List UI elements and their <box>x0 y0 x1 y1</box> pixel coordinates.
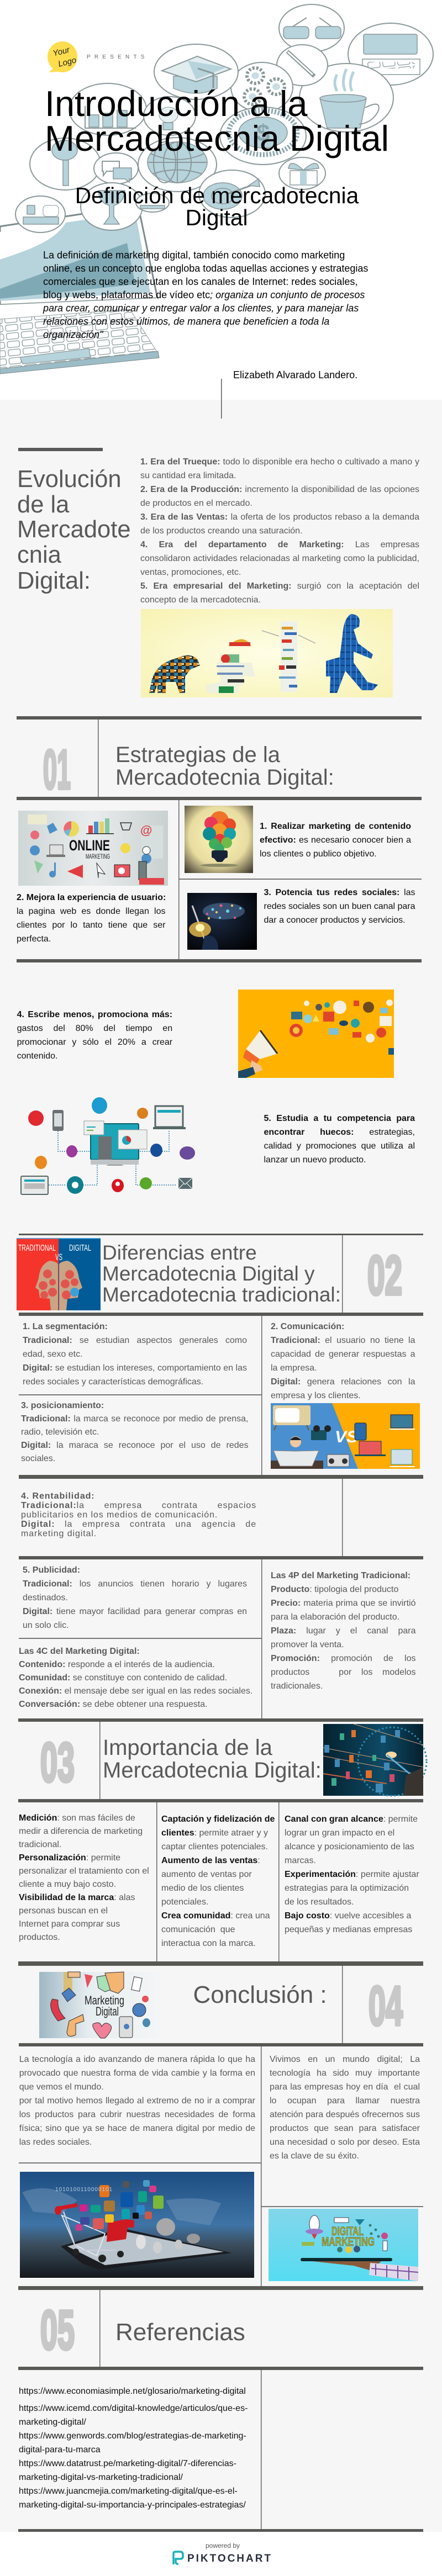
image: online marketing <box>18 811 168 886</box>
illustration: marketing icons in circles with laptop: $ <box>256 120 270 147</box>
text: comunicación: 2. Comunicación: <box>271 1322 344 1331</box>
text: publicidad: 5. Publicidad: <box>23 1565 80 1575</box>
image: digital marketing on tablet: MARKETING <box>322 2235 375 2249</box>
definition paragraph: comerciales que se ejecutan en los canales de Internet: redes sociales, <box>43 276 357 287</box>
text: references list: https://www.juancmejia.com/marketing-digital/que-es-el- <box>19 2487 238 2496</box>
icon: piktochart logo <box>173 2552 183 2564</box>
text column: captación: Aumento de las ventas: <box>161 1856 260 1865</box>
author: Elizabeth Alvarado Landero. <box>233 369 357 380</box>
text: rentabilidad: Tradicional:la empresa contrata espacios <box>21 1501 256 1510</box>
text: escribe menos: contenido. <box>17 1051 57 1061</box>
heading: Mercadote <box>17 516 131 543</box>
heading: Mercadotecnia tradicional: <box>102 1283 341 1306</box>
text: escribe menos: promocionar y sólo el 20% a crear <box>17 1038 172 1047</box>
text: estudia a tu competencia: calidad y promociones que utiliza al <box>264 1141 415 1151</box>
text: experiencia de usuario: 2. Mejora la experiencia de usuario: <box>17 893 166 902</box>
text: comunicación: capacidad de generar respuestas a <box>271 1350 415 1359</box>
text: experiencia de usuario: clientes por lo tanto tiene que ser <box>17 921 166 930</box>
text: estudia a tu competencia: lanzar un nuevo producto. <box>264 1155 366 1165</box>
image: online marketing: MARKETING <box>86 853 110 860</box>
text column: medición: Visibilidad de la marca: alas <box>19 1893 135 1902</box>
text: conclusión derecha: lo ocupan para llamar nuestra <box>270 2096 420 2106</box>
text: rentabilidad: Digital: la empresa contrata una agencia de <box>21 1520 256 1529</box>
text: conclusión izquierda: La tecnología a ido avanzando de manera rápida lo que ha <box>19 2055 255 2064</box>
presents label: PRESENTS <box>87 54 149 60</box>
text: conclusión derecha: productos que sean para satisfacer <box>270 2124 420 2133</box>
icon: yellow logo bubble: Logo <box>57 55 77 69</box>
text: las 4P: Precio: materia prima que se invirtió <box>271 1599 415 1608</box>
text column: canal: estrategias para la optimización <box>285 1884 409 1893</box>
definition paragraph: online, es un concepto que engloba todas aquellas acciones y estrategias <box>43 263 368 274</box>
text: rentabilidad: 4. Rentabilidad: <box>21 1491 95 1501</box>
eras list <box>140 455 419 607</box>
text column: captación: captar clientes potenciales. <box>161 1842 268 1852</box>
text column: canal: Canal con gran alcance: permite <box>285 1815 418 1824</box>
eras list: 3. Era de las Ventas: la oferta de los productos rebaso a la demanda <box>140 512 419 522</box>
text column: medición: personalizar el tratamiento con el <box>19 1866 149 1875</box>
text column: canal: lograr un gran impacto en el <box>285 1828 394 1838</box>
text: posicionamiento: Tradicional: la marca se reconoce por medio de prensa, <box>21 1414 249 1424</box>
text column: canal: Experimentación: permite ajustar <box>285 1870 419 1879</box>
text: estudia a tu competencia: 5. Estudia a tu competencia para <box>264 1114 415 1123</box>
text column: captación: medio de los clientes <box>161 1884 244 1893</box>
text: conclusión derecha: una necesidad o solo por deseo. Esta <box>270 2138 420 2147</box>
text: posicionamiento <box>21 1399 249 1466</box>
heading: Importancia de la <box>103 1736 273 1760</box>
text: redes sociales: redes sociales son un buen canal para <box>264 902 415 911</box>
text: references list: marketing-digital-su-importancia-y-principales-estrategias/ <box>19 2500 246 2510</box>
text: rentabilidad: publicitarios en los medios de comunicación. <box>21 1510 218 1520</box>
text column: medición: Personalización: permite <box>19 1853 120 1862</box>
text: publicidad <box>23 1563 247 1632</box>
text: redes sociales <box>264 886 415 927</box>
text column: medición: Medición: son mas fáciles de <box>19 1813 135 1822</box>
text column: captación <box>161 1812 277 1950</box>
text: las 4P: para la elaboración del producto. <box>271 1612 399 1622</box>
text column: medición: cliente a muy bajo costo. <box>19 1880 116 1889</box>
eras list: 2. Era de la Producción: incremento la disponibilidad de las opciones <box>140 485 419 494</box>
text: las 4C: Contenido: responde a el interés de la audiencia. <box>19 1660 215 1669</box>
text column: captación: potenciales. <box>161 1897 208 1907</box>
image: colourful light bulb <box>185 806 253 873</box>
eras list: su cantidad era limitada. <box>140 471 236 480</box>
text column: canal: pequeñas y medianas empresas <box>285 1925 412 1934</box>
text: comunicación: Tradicional: el usuario no tiene la <box>271 1336 415 1345</box>
text: las 4P: Las 4P del Marketing Tradicional: <box>271 1571 411 1580</box>
text: conclusión izquierda: provocado que nuestra forma de vida cambie y la forma en <box>19 2069 255 2078</box>
definition paragraph: La definición de marketing digital, también conocido como marketing <box>43 250 345 261</box>
eras list: consolidaron actividades relacionadas al marketing como la publicidad, <box>140 554 419 563</box>
text: publicidad: un solo clic. <box>23 1621 69 1630</box>
image: marketing digital doodles <box>39 1972 161 2038</box>
text: posicionamiento: Digital: la maraca se reconoce por el uso de redes <box>21 1440 249 1450</box>
footer: powered by piktochart <box>0 2532 442 2576</box>
text: references list: https://www.icemd.com/digital-knowledge/articulos/que-es- <box>19 2404 248 2413</box>
text: conclusión derecha: para las empresas hoy en día el cual <box>270 2082 420 2092</box>
eras list: ventas, promociones, etc. <box>140 568 241 577</box>
text: conclusión izquierda: por tal motivo hemos llegado al extremo de no ir a comprar <box>19 2096 255 2106</box>
image: online marketing: @ <box>140 823 152 837</box>
text: marketing de contenido: 1. Realizar marketing de contenido <box>260 822 411 831</box>
text: escribe menos: gastos del 80% del tiempo en <box>17 1024 172 1033</box>
text: publicidad: Digital: tiene mayor facilidad para generar compras en <box>23 1607 247 1616</box>
image: digital network tech <box>323 1724 427 1796</box>
number 04: 04 <box>369 1975 403 2037</box>
text: escribe menos: 4. Escribe menos, promociona más: <box>17 1010 172 1019</box>
text column: captación: interactua con la marca. <box>161 1939 256 1948</box>
text: las 4P: tradicionales. <box>271 1681 323 1691</box>
text: references list: marketing-digital/ <box>19 2418 86 2427</box>
heading: Diferencias entre <box>102 1241 257 1264</box>
number 03: 03 <box>40 1732 75 1794</box>
text column: medición: productos. <box>19 1933 60 1942</box>
title: Mercadotecnia Digital <box>45 118 389 158</box>
text column: captación: comunicación que <box>161 1925 235 1934</box>
text column: captación: aumento de ventas por <box>161 1870 252 1879</box>
text column: captación: Crea comunidad: crea una <box>161 1911 270 1921</box>
image: shopping cart on tablet <box>20 2172 254 2278</box>
definition paragraph: relaciones con estos últimos, de manera que beneficien a toda la <box>43 316 329 327</box>
text: experiencia de usuario: la pagina web es donde llegan los <box>17 907 166 916</box>
text column: canal: alcance y posicionamiento de las <box>285 1842 414 1852</box>
heading: Conclusión : <box>193 1981 327 2008</box>
eras list: concepto de la mercadotecnia. <box>140 595 261 605</box>
title: Introducción a la <box>45 83 308 124</box>
text: publicidad: Tradicional: los anuncios tienen horario y lugares <box>23 1579 247 1589</box>
illustration: marketing icons in circles with laptop <box>0 4 433 374</box>
number 05: 05 <box>40 2299 75 2361</box>
text: conclusión izquierda: física; sino que ya se hace de manera digital por medio de <box>19 2124 255 2133</box>
text: las 4P: Producto: tipologia del producto <box>271 1585 398 1594</box>
panel: hero header <box>0 0 442 400</box>
text: references list: marketing-digital-vs-marketing-tradicional/ <box>19 2473 183 2482</box>
text: experiencia de usuario <box>17 891 166 946</box>
panel: section 03 importancia <box>18 1718 427 1966</box>
text: rentabilidad <box>21 1491 256 1538</box>
text: redes sociales: 3. Potencia tus redes sociales: las <box>264 888 415 897</box>
text: comunicación: la empresa. <box>271 1363 317 1373</box>
text column: medición <box>19 1811 155 1944</box>
text: comunicación: Digital: genera relaciones con la <box>271 1377 415 1387</box>
panel: section 01 estrategias <box>17 716 422 1194</box>
text: references list: https://www.datatrust.pe/marketing-digital/7-diferencias- <box>19 2459 236 2468</box>
text: marketing de contenido: los clientes o publico objetivo. <box>260 849 377 859</box>
text: publicidad: destinados. <box>23 1593 68 1602</box>
text column: canal: Bajo costo: vuelve accesibles a <box>285 1911 411 1921</box>
text: estudia a tu competencia: encontrar huecos: estrategias, <box>264 1128 415 1137</box>
image: marketing digital doodles: Digital <box>96 2004 119 2018</box>
text: experiencia de usuario: perfecta. <box>17 934 51 944</box>
panel: evolución de la mercadotecnia <box>17 448 419 697</box>
text: las 4P: Plaza: lugar y el canal para <box>271 1626 415 1636</box>
text: las 4P <box>271 1569 415 1693</box>
text: conclusión izquierda <box>19 2053 255 2149</box>
image: megaphone on yellow <box>238 990 394 1078</box>
text column: canal <box>285 1812 423 1937</box>
text: las 4C: Comunidad: se constituye con contenido de calidad. <box>19 1673 227 1682</box>
text: marketing de contenido: efectivo: es necesario conocer bien a <box>260 835 411 845</box>
text: posicionamiento: sociales. <box>21 1453 55 1463</box>
image: shopping cart on tablet: 1010100110000101 <box>55 2187 113 2193</box>
image: hand with social icons <box>187 893 257 950</box>
text: comunicación: empresa y los clientes. <box>271 1391 361 1400</box>
text: redes sociales: dar a conocer productos y servicios. <box>264 916 406 925</box>
text: las 4P: Promoción: promoción de los <box>271 1654 415 1663</box>
text: las 4C: Las 4C del Marketing Digital: <box>19 1647 140 1655</box>
text: conclusión derecha: tecnología ha sido muy importante <box>270 2069 420 2078</box>
text: estudia a tu competencia <box>264 1112 415 1167</box>
text: comunicación <box>271 1320 415 1403</box>
text column: medición: medir a diferencia de marketing <box>19 1827 143 1836</box>
text: las 4P: productos por los modelos <box>271 1668 415 1677</box>
panel: section 05 referencias <box>18 2286 423 2532</box>
heading: Estrategias de la <box>115 743 281 767</box>
footer: powered by piktochart: PIKTOCHART <box>187 2553 271 2564</box>
number 02: 02 <box>367 1245 402 1306</box>
text: segmentación: redes sociales y características demográficas. <box>23 1377 203 1387</box>
text: conclusión derecha: atención para después ofrecernos sus <box>270 2110 420 2119</box>
text: segmentación: 1. La segmentación: <box>23 1322 108 1331</box>
eras list: 1. Era del Trueque: todo lo disponible era hecho o cultivado a mano y <box>140 457 419 467</box>
image: evolution silhouettes <box>141 609 393 697</box>
subtitle: Digital <box>185 205 248 230</box>
text: segmentación: Digital: se estudian los intereses, comportamiento en las <box>23 1363 247 1373</box>
image: digital marketing on tablet <box>269 2209 418 2281</box>
image: traditional vs digital: DIGITAL <box>69 1244 91 1253</box>
image: traditional vs digital <box>17 1238 101 1310</box>
text: posicionamiento: radio, televisión etc. <box>21 1427 99 1437</box>
panel: section 02 diferencias <box>17 1234 423 1718</box>
heading: Mercadotecnia Digital y <box>102 1262 315 1285</box>
text: references list <box>19 2384 261 2512</box>
heading: de la <box>17 491 70 518</box>
eras list: 5. Era empresarial del Marketing: surgió con la aceptación del <box>140 581 419 591</box>
image: connected devices diagram <box>21 1097 195 1194</box>
definition paragraph: blog y webs, plataformas de vídeo etc; organiza un conjunto de procesos <box>43 289 365 300</box>
text: segmentación <box>23 1320 247 1389</box>
image: marketing digital doodles: Marketing <box>85 1993 124 2007</box>
text: las 4C <box>19 1644 261 1711</box>
text: references list: https://www.genwords.com/blog/estrategias-de-marketing- <box>19 2431 246 2441</box>
text: conclusión derecha: Vivimos en un mundo digital; La <box>270 2055 420 2064</box>
definition paragraph <box>43 248 397 348</box>
text: references list: https://www.economiasimple.net/glosario/marketing-digital <box>19 2387 246 2396</box>
text: conclusión derecha <box>270 2053 420 2163</box>
heading: Evolución <box>17 466 122 493</box>
text: conclusión izquierda: los productos para cubrir nuestras necesidades de forma <box>19 2110 255 2119</box>
text column: medición: Internet para comprar sus <box>19 1919 120 1928</box>
image: digital marketing on tablet: DIGITAL <box>332 2224 364 2238</box>
text column: medición: personas buscan en el <box>19 1906 108 1915</box>
image: traditional vs digital media: VS <box>335 1428 358 1446</box>
text: conclusión izquierda: que vemos el mundo. <box>19 2082 104 2092</box>
text: conclusión izquierda: las redes sociales. <box>19 2138 92 2147</box>
eras list: 4. Era del departamento de Marketing: Las empresas <box>140 540 419 549</box>
eras list: de productos en el mercado. <box>140 499 252 508</box>
icon: yellow logo bubble <box>48 41 77 72</box>
heading: cnia <box>17 542 62 568</box>
panel: section 01 estrategias: 01 <box>43 739 71 801</box>
text: marketing de contenido <box>260 819 411 861</box>
heading: Mercadotecnia Digital: <box>115 765 334 790</box>
text column: medición: tradicional. <box>19 1840 61 1849</box>
text: las 4P: promover la venta. <box>271 1640 344 1649</box>
heading: Mercadotecnia Digital: <box>103 1758 322 1782</box>
text: references list: digital-para-tu-marca <box>19 2445 101 2455</box>
image: traditional vs digital: VS <box>55 1252 62 1262</box>
text: rentabilidad: marketing digital. <box>21 1529 97 1538</box>
footer: powered by piktochart: powered by <box>206 2542 240 2549</box>
text column: canal: de los resultados. <box>285 1897 354 1907</box>
text column: canal: marcas. <box>285 1856 316 1865</box>
text: posicionamiento: 3. posicionamiento: <box>21 1400 104 1410</box>
text: escribe menos <box>17 1008 172 1063</box>
definition paragraph: para crear, comunicar y entregar valor a los clientes, y para manejar las <box>43 303 359 314</box>
image: traditional vs digital media <box>271 1403 420 1469</box>
definition paragraph: organización" <box>43 329 103 340</box>
image: traditional vs digital: TRADITIONAL <box>18 1244 56 1253</box>
text: las 4C: Conversación: se debe obtener una respuesta. <box>19 1700 208 1708</box>
subtitle: Definición de mercadotecnia <box>75 183 359 208</box>
eras list: de los productos creando una saturación. <box>140 526 303 536</box>
text: conclusión derecha: es la clave de su éxito. <box>270 2151 359 2161</box>
text column: captación: clientes: permite atraer y y <box>161 1828 268 1838</box>
image: online marketing: ONLINE <box>69 837 110 854</box>
text: segmentación: Tradicional: se estudian aspectos generales como <box>23 1336 247 1345</box>
text column: captación: Captación y fidelización de <box>161 1815 275 1824</box>
heading: Digital: <box>17 568 91 594</box>
heading: Referencias <box>115 2319 245 2346</box>
text: segmentación: edad, sexo etc. <box>23 1350 83 1359</box>
panel: section 04 conclusión <box>19 1966 423 2286</box>
text: las 4C: Conexión: el mensaje debe ser igual en las redes sociales. <box>19 1686 252 1695</box>
icon: yellow logo bubble: Your <box>52 45 71 59</box>
